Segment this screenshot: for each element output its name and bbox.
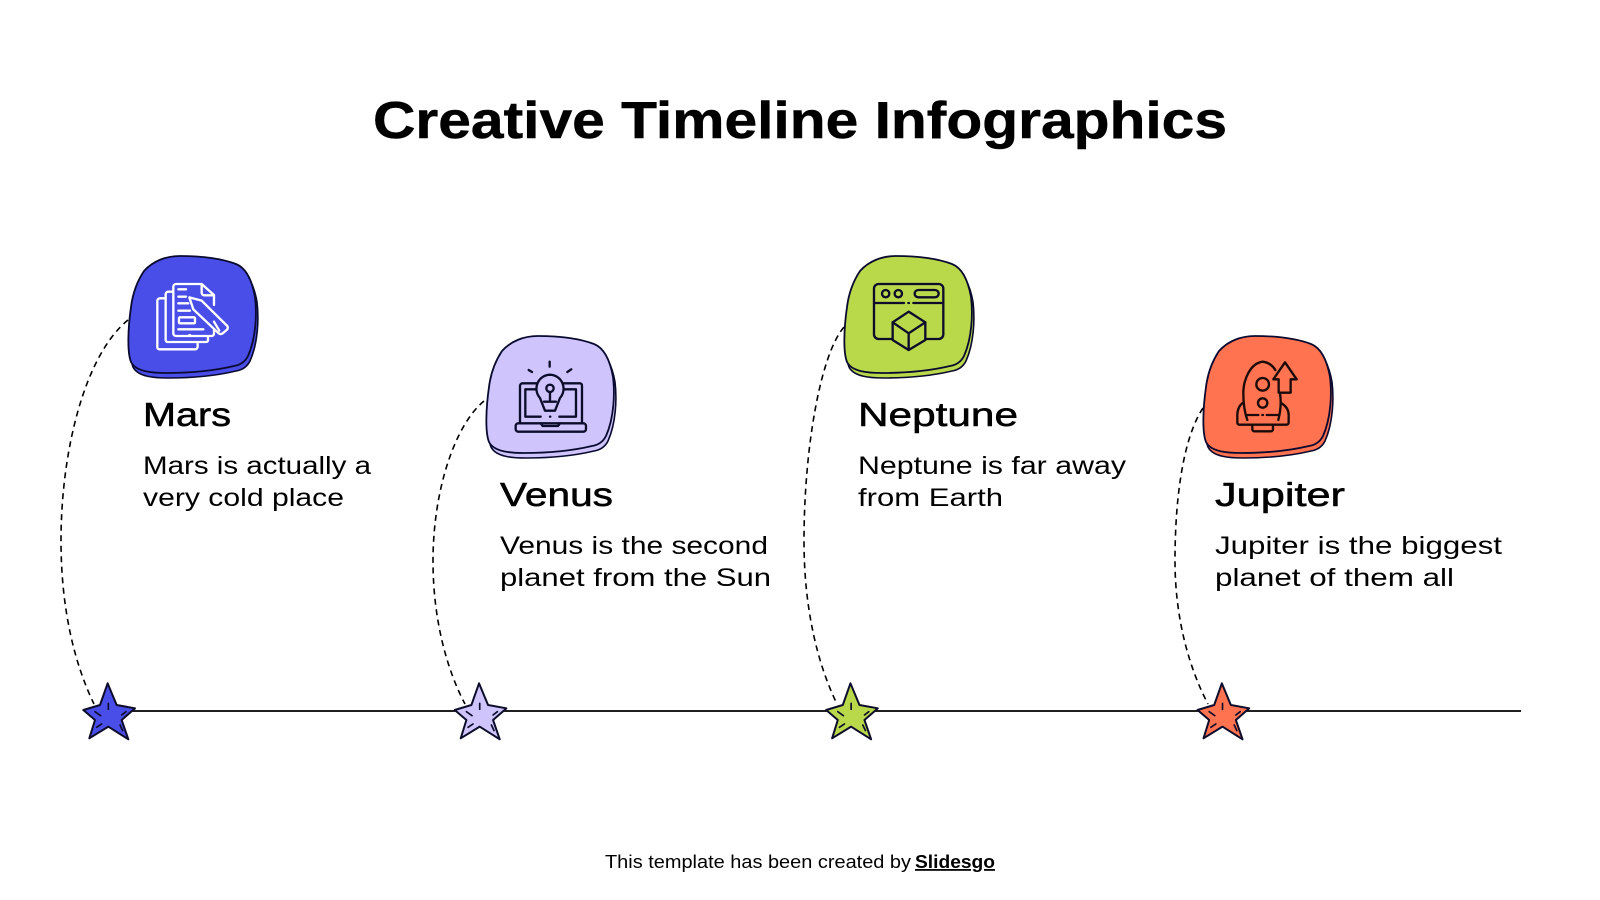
icon tile: Jupiter — [1203, 336, 1333, 458]
icon tile: Neptune — [844, 256, 974, 378]
description: Mars: Mars is actually a — [143, 452, 371, 480]
star marker: Venus — [455, 683, 506, 739]
icon: rocket with up arrow — [1237, 362, 1297, 431]
description: Jupiter: Jupiter is the biggest — [1215, 532, 1502, 560]
icon: documents and pencil — [157, 284, 228, 349]
description: Venus — [500, 532, 771, 592]
icon tile: Venus — [486, 336, 616, 458]
description: Neptune: Neptune is far away — [858, 452, 1127, 480]
footer credit: This template has been created by — [605, 852, 911, 872]
star marker: Mars — [83, 683, 135, 739]
heading: Jupiter: Jupiter — [1215, 476, 1345, 513]
description: Venus: Venus is the second — [500, 532, 768, 560]
dashed connector: Neptune — [804, 327, 844, 704]
icon: laptop with light bulb — [516, 362, 586, 432]
title: Creative Timeline Infographics — [373, 92, 1227, 150]
panel: Jupiter — [1175, 336, 1502, 739]
timeline axis — [130, 710, 1521, 712]
icon: browser window with cube — [874, 284, 943, 350]
description: Neptune: from Earth — [858, 484, 1003, 512]
heading: Venus: Venus — [500, 476, 613, 513]
panel: Venus — [433, 336, 771, 739]
description: Mars — [143, 452, 371, 512]
dashed connector: Mars — [61, 320, 128, 704]
dashed connector: Jupiter — [1175, 408, 1208, 704]
dashed connector: Venus — [433, 401, 484, 704]
heading: Neptune: Neptune — [858, 396, 1018, 433]
star marker: Jupiter — [1198, 683, 1249, 739]
description: Mars: very cold place — [143, 484, 344, 512]
star marker: Neptune — [826, 683, 878, 739]
panel: Neptune — [804, 256, 1127, 739]
heading: Mars: Mars — [143, 396, 231, 433]
description: Venus: planet from the Sun — [500, 564, 771, 592]
description: Jupiter — [1215, 532, 1502, 592]
description: Neptune — [858, 452, 1127, 512]
icon tile: Mars — [128, 256, 258, 378]
panel: Mars — [61, 256, 371, 739]
footer credit: Slidesgo — [915, 852, 995, 872]
description: Jupiter: planet of them all — [1215, 564, 1454, 592]
